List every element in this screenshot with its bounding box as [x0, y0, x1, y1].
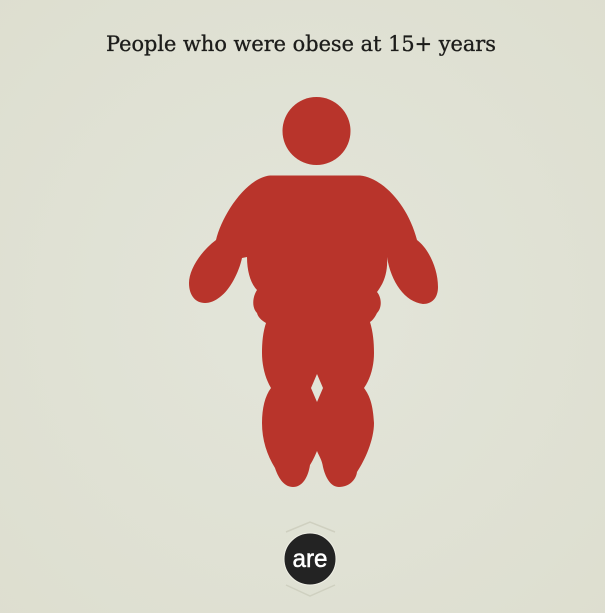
head	[282, 97, 350, 165]
figure: obese person silhouette	[189, 97, 438, 487]
title: People who were obese at 15+ years	[106, 32, 496, 57]
logo text: are	[292, 545, 328, 573]
hexagon outline bottom	[286, 585, 335, 596]
body	[189, 176, 438, 487]
logo circle	[284, 533, 336, 585]
logo: are badge	[284, 522, 336, 596]
hexagon outline top	[286, 522, 335, 532]
